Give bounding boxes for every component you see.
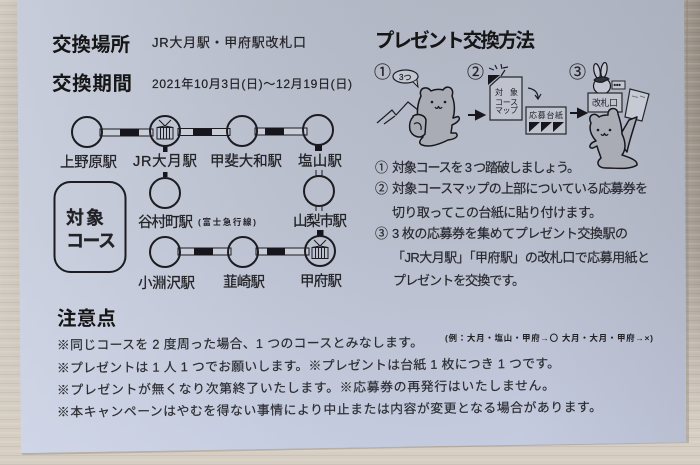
step number 2: ② [467, 63, 484, 82]
station labels: 甲府駅 [300, 273, 342, 290]
notes list: ※プレゼントが無くなり次第終了いたします。※応募券の再発行はいたしません。 [57, 378, 555, 397]
instructions list: 切り取ってこの台紙に貼り付けます。 [392, 205, 602, 220]
arrow: step 1 to 2 [468, 111, 484, 119]
track segments [100, 128, 324, 255]
speech bubble: 3つ [399, 73, 411, 82]
notes list: ※同じコースを 2 度周った場合、1 つのコースとみなします。 [57, 335, 423, 352]
station labels: 小淵沢駅 [138, 275, 196, 292]
notes list: ※本キャンペーンはやむを得ない事情により中止または内容が変更となる場合があります。 [57, 399, 602, 419]
bear with tail [590, 108, 637, 168]
instructions list: ① [375, 160, 388, 175]
station labels [60, 153, 348, 292]
station circle: 甲府 with gift [305, 236, 335, 266]
notes list: ※プレゼントは 1 人 1 つでお願いします。※プレゼントは台紙 1 枚につき 1 つです。 [57, 356, 560, 375]
illustration: step 3 [569, 62, 649, 168]
heading: notes: 注意点 [57, 308, 116, 330]
mountain [377, 102, 418, 124]
instructions list: 対象コースマップの上部についている応募券を [392, 181, 648, 196]
instructions list: 「JR大月駅」「甲府駅」の改札口で応募用紙と [392, 250, 650, 265]
cut marks [489, 64, 508, 76]
station labels: 上野原駅 [60, 154, 118, 171]
station circle: JR大月 with gift [150, 116, 180, 146]
course map document [488, 75, 522, 120]
course example: (例：大月・塩山・甲府→〇 大月・大月・甲府→×) [445, 333, 653, 343]
station circle: 塩山 [303, 115, 333, 145]
station labels: 甲斐大和駅 [210, 153, 282, 170]
target course box: 対象 [66, 208, 104, 228]
target course box [54, 182, 126, 272]
station circle: 上野原 [72, 117, 102, 147]
illustration: step 2 [467, 63, 566, 134]
heading: exchange place: 交換場所 [52, 33, 130, 56]
rabbit station staff [593, 62, 610, 94]
station labels: 韮崎駅 [223, 274, 266, 291]
station labels: JR大月駅 [133, 153, 198, 170]
step number 3: ③ [569, 63, 586, 82]
instructions list: ③ [375, 226, 388, 241]
station circle: 山梨市 [304, 176, 334, 206]
bear hiker [410, 87, 459, 146]
application paper [625, 89, 649, 121]
instructions list [375, 160, 650, 288]
entry sheet: 応募台紙 [529, 110, 563, 120]
station labels: 塩山駅 [298, 153, 342, 170]
speech box: ••• [614, 82, 621, 90]
station labels: (富士急行線) [198, 217, 256, 227]
instructions list: ② [375, 181, 388, 196]
station labels: 谷村町駅 [138, 214, 194, 231]
course map document: コース [495, 98, 518, 107]
course map document: マップ [495, 106, 518, 115]
station circle: 韮崎 [228, 237, 258, 267]
route map [60, 115, 348, 292]
target course box: コース [66, 231, 116, 251]
heading: exchange period: 交換期間 [52, 72, 132, 95]
station circle: 谷村町 [150, 178, 180, 208]
exchange period text: 2021年10月3日(日)〜12月19日(日) [152, 77, 352, 91]
station labels: 山梨市駅 [293, 213, 348, 230]
instructions list: 3 枚の応募券を集めてプレゼント交換駅の [392, 226, 628, 241]
notes list [57, 333, 653, 419]
instructions list: プレゼントを交換です。 [393, 273, 525, 288]
heading: how to exchange: プレゼント交換方法 [375, 29, 535, 52]
station circle: 甲斐大和 [227, 116, 257, 146]
exchange place text: JR大月駅・甲府駅改札口 [152, 35, 306, 50]
ticket gate sign: 改札口 [592, 97, 618, 108]
step number 1: ① [374, 63, 391, 82]
course map document: 対 象 [495, 87, 518, 97]
arrow: step 2 to 3 [570, 109, 586, 117]
instructions list: 対象コースを 3 つ踏破しましょう。 [392, 160, 580, 175]
station circle: 小淵沢 [150, 237, 180, 267]
curved arrow [528, 88, 541, 99]
illustration: step 1 [374, 63, 459, 146]
